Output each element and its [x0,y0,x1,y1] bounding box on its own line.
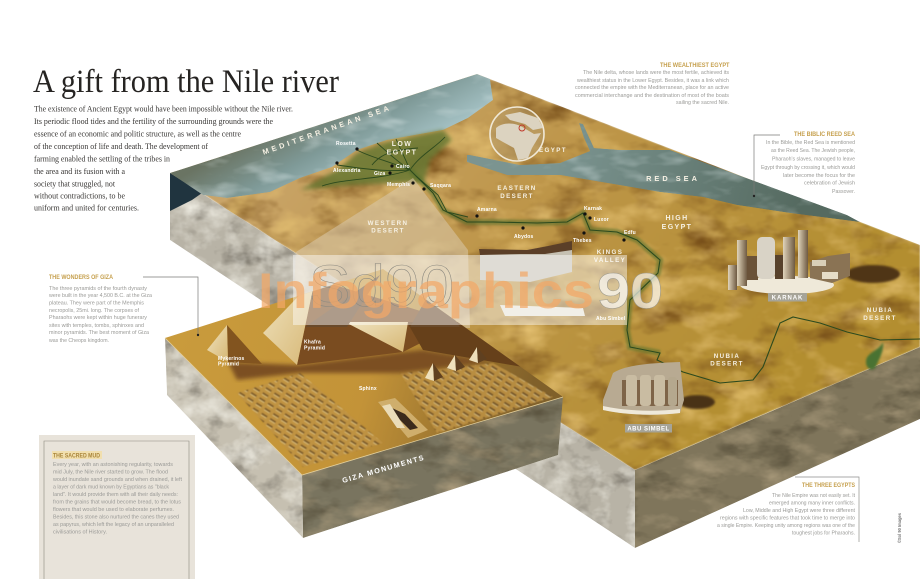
text: the three Egypts: THE THREE EGYPTS [802,482,855,489]
city labels: Karnak [584,206,602,212]
text: the wonders of Giza: The three pyramids of the fourth dynasty [49,286,147,292]
text: the biblic reed sea: Egypt through by crossing it, which would [761,165,855,171]
frame line: three Egypts [795,477,859,542]
intro text [34,104,293,213]
sea and region labels: DESERT [710,360,744,368]
Deir el-Bahari cliff [479,241,585,316]
desert surface [170,74,920,470]
river Nile [410,170,920,383]
text: the biblic reed sea: Pharaoh's slaves, managed to leave [772,156,855,162]
sea and region labels: EGYPT [539,147,567,154]
intro text: The existence of Ancient Egypt would have been impossible without the Nile river. [34,104,293,114]
Gulf of Suez and Red Sea [467,123,860,222]
sea and region labels: EGYPT [387,150,417,156]
label: Karnak [768,293,807,302]
panel: the sacred mud: flowers that would be used to elaborate perfumes. [53,507,174,513]
Mykerinos lit side [207,325,228,362]
sea and region labels: WESTERN [368,220,408,227]
intro text: Its periodic flood tides and the fertility of the surrounding grounds were the [34,116,273,126]
Nile confluence green patch [866,342,883,369]
Giza monuments block [165,269,563,538]
watermark outline ghost: Sd90 [309,254,454,319]
watermark band: Abu Simbel [596,316,626,322]
panel: the sacred mud: THE SACRED MUD [53,452,100,460]
panel: the sacred mud [39,435,195,579]
map city dots [335,147,626,242]
Khafre dark side [297,285,420,365]
city labels [333,141,636,244]
text: the biblic reed sea: In the Bible, the Red Sea is mentioned [766,140,855,146]
sea and region labels: NUBIA [714,353,740,360]
Giza left rock face [165,338,303,538]
text: the three Egypts: emerged among many inner conflicts. [769,500,855,506]
title: A gift from the Nile river [33,64,339,100]
sea and region labels: EASTERN [497,185,537,192]
text: the wonders of Giza: necropolis, 25mi. long. The corpses of [49,308,139,314]
sea and region labels: KINGS [597,249,623,256]
watermark text: Infographics [258,263,594,319]
Giza plateau surface [165,269,563,475]
right rock face of main block [635,347,920,548]
panel: the sacred mud: would inundate sand grounds and when drained, it left [52,477,182,483]
sea and region labels: VALLEY [594,257,626,264]
tombs field east [400,363,553,433]
text: the wonders of Giza: Pharaohs were kept within huge funerary [49,315,147,321]
city labels: Saqqara [430,183,451,189]
panel: the sacred mud: land". It would provide them with all their daily needs: [53,492,178,498]
intro text: without contradictions, to be [34,190,125,200]
text: the wonders of Giza: was the Cheops kingdom. [48,338,109,344]
sea and region labels [261,103,897,367]
text: the wonders of Giza: minor pyramids. The best moment of Giza [49,330,150,336]
Nile delta branches [322,137,445,186]
globe locator [490,107,544,161]
Mykerinos dark side [227,325,262,364]
text: the biblic reed sea [761,131,855,195]
city labels: Abydos [514,234,534,240]
text: the three Egypts: regions with specific features that took time to merge into [720,516,855,522]
text: the wealthiest Egypt: The Nile delta, whose lands were the most fertile, achieved its [583,70,729,76]
pyramid labels: Pyramid [218,362,239,368]
label: Abu Simbel [625,424,672,433]
text: the biblic reed sea: celebration of Jewish [804,180,855,186]
city labels: Memphis [387,182,410,188]
text: the biblic reed sea: later become the focus for the [783,173,855,179]
sea and region labels: LOW [392,141,412,148]
Cheops lit side [345,322,408,352]
text: the wealthiest Egypt: commercial interchange and the destination of most of the boats [575,93,729,99]
credit: ©Sol 90 Images [897,512,902,543]
intro text: uniform and united for centuries. [34,203,139,213]
city labels: Rosetta [336,141,356,147]
text: the wealthiest Egypt: connected the empire with the Mediterranean, place for an active [575,85,729,91]
city labels: Edfu [624,230,636,236]
Khafre lit side [263,292,312,365]
watermark band [258,254,663,325]
pyramid labels: Khafra [304,340,321,346]
label: Giza monuments: GIZA MONUMENTS [341,453,426,485]
sea and region labels: EGYPT [662,224,692,231]
Giza right rock face [302,397,563,538]
Karnak temple illustration [728,230,900,294]
pale light cone of the great pyramid [292,178,470,328]
sea and region labels: RED SEA [646,174,700,183]
panel: the sacred mud: Every year, with an astonishing regularity, towards [53,462,173,468]
city labels: Thebes [573,238,592,244]
text: the wealthiest Egypt: wealthiest status in the Lower Egypt. Besides, it was a link which [576,78,729,84]
sea and region labels: DESERT [500,193,534,200]
text: the biblic reed sea: as the Reed Sea. The Jewish people, [771,148,855,154]
rim highlight of plateau [165,338,563,475]
Mediterranean Sea [170,74,493,198]
leader line: Giza [143,277,199,336]
text: the wonders of Giza: plateau. They were part of the Memphis [49,300,144,306]
plateau details clipped to surface [207,275,553,467]
pyramid shadow band [228,350,523,380]
sea and region labels: DESERT [371,228,405,234]
panel: the sacred mud: Besides, this stone also nurtured the canes they used [53,514,179,520]
ghost pyramids behind the watermark [305,275,380,327]
intro text: of the conception of life and death. The development of [34,141,208,151]
tombs field west [237,373,383,467]
pyramid labels [218,340,377,392]
pyramid labels: Mykerinos [218,356,245,362]
intro text: essence of an economic and politic structure, as well as the centre [34,129,241,139]
text: the three Egypts: toughest jobs for Pharaohs. [792,530,855,536]
text: the three Egypts: The Nile Empire was not easily set. It [772,493,855,499]
second Nile channel [416,176,468,217]
intro text: the area and its fusion with a [34,166,125,176]
city labels: Giza [374,171,385,177]
dark corner of the sea cut [170,173,202,211]
main 3D block: map of Egypt [170,74,920,548]
panel: the sacred mud: mid July, the Nile river started to grow. The flood [53,470,168,476]
pyramid labels: Pyramid [304,346,325,352]
intro text: farming enabled the settling of the tribes in [34,154,171,164]
sea and region labels: DESERT [863,315,897,322]
Sphinx [378,398,428,438]
text: the wealthiest Egypt [575,62,730,106]
panel: the sacred mud: as papyrus, which left the legacy of an unparalleled [53,522,174,528]
left rock face of main block [170,173,635,548]
text: the wonders of Giza: THE WONDERS OF GIZA [49,274,113,281]
delta green area [300,130,452,190]
city labels: Amarna [477,207,497,213]
text: the biblic reed sea: Passover. [832,189,855,195]
watermark numerals: 90 [597,263,663,319]
pyramid labels: Sphinx [359,386,377,392]
leader line: reed sea [753,135,780,197]
panel: the sacred mud: from the grains that would become bread, to the lotus [53,500,181,506]
text: the wealthiest Egypt: sailing the sacred Nile. [676,100,729,106]
text: the biblic reed sea: THE BIBLIC REED SEA [794,131,855,138]
panel: the sacred mud: a layer of dark mud known by Egyptians as "black [53,484,169,490]
text: the wonders of Giza: sites with temples, tombs, sphinxes and [49,323,144,329]
text: the wonders of Giza: were built in the year 4,500 B.C. at the Giza [48,293,153,299]
small queen pyramids [425,347,487,381]
Abu Simbel temple illustration [603,362,715,415]
panel: the sacred mud: civilisations of History. [53,530,107,536]
city labels: Alexandria [333,168,361,174]
Cheops dark side [407,322,523,367]
intro text: society that struggled, not [34,179,116,189]
Nile green valley [410,170,660,353]
text: the wealthiest Egypt: THE WEALTHIEST EGYPT [660,62,730,69]
city labels: Luxor [594,217,609,223]
sea and region labels: HIGH [665,215,689,222]
text: the three Egypts [717,482,855,536]
sea and region labels: MEDITERRANEAN SEA [261,103,393,157]
label: Abu Simbel: ABU SIMBEL [627,427,670,433]
text: the three Egypts: Low, Middle and High Egypt were three different [743,508,855,514]
sea and region labels: NUBIA [867,307,893,314]
text: the three Egypts: a single Empire. Keeping unity among regions was one of the [717,523,855,529]
label: Karnak: KARNAK [772,296,803,302]
text: the wonders of Giza [48,274,153,344]
city labels: Cairo [396,164,410,170]
